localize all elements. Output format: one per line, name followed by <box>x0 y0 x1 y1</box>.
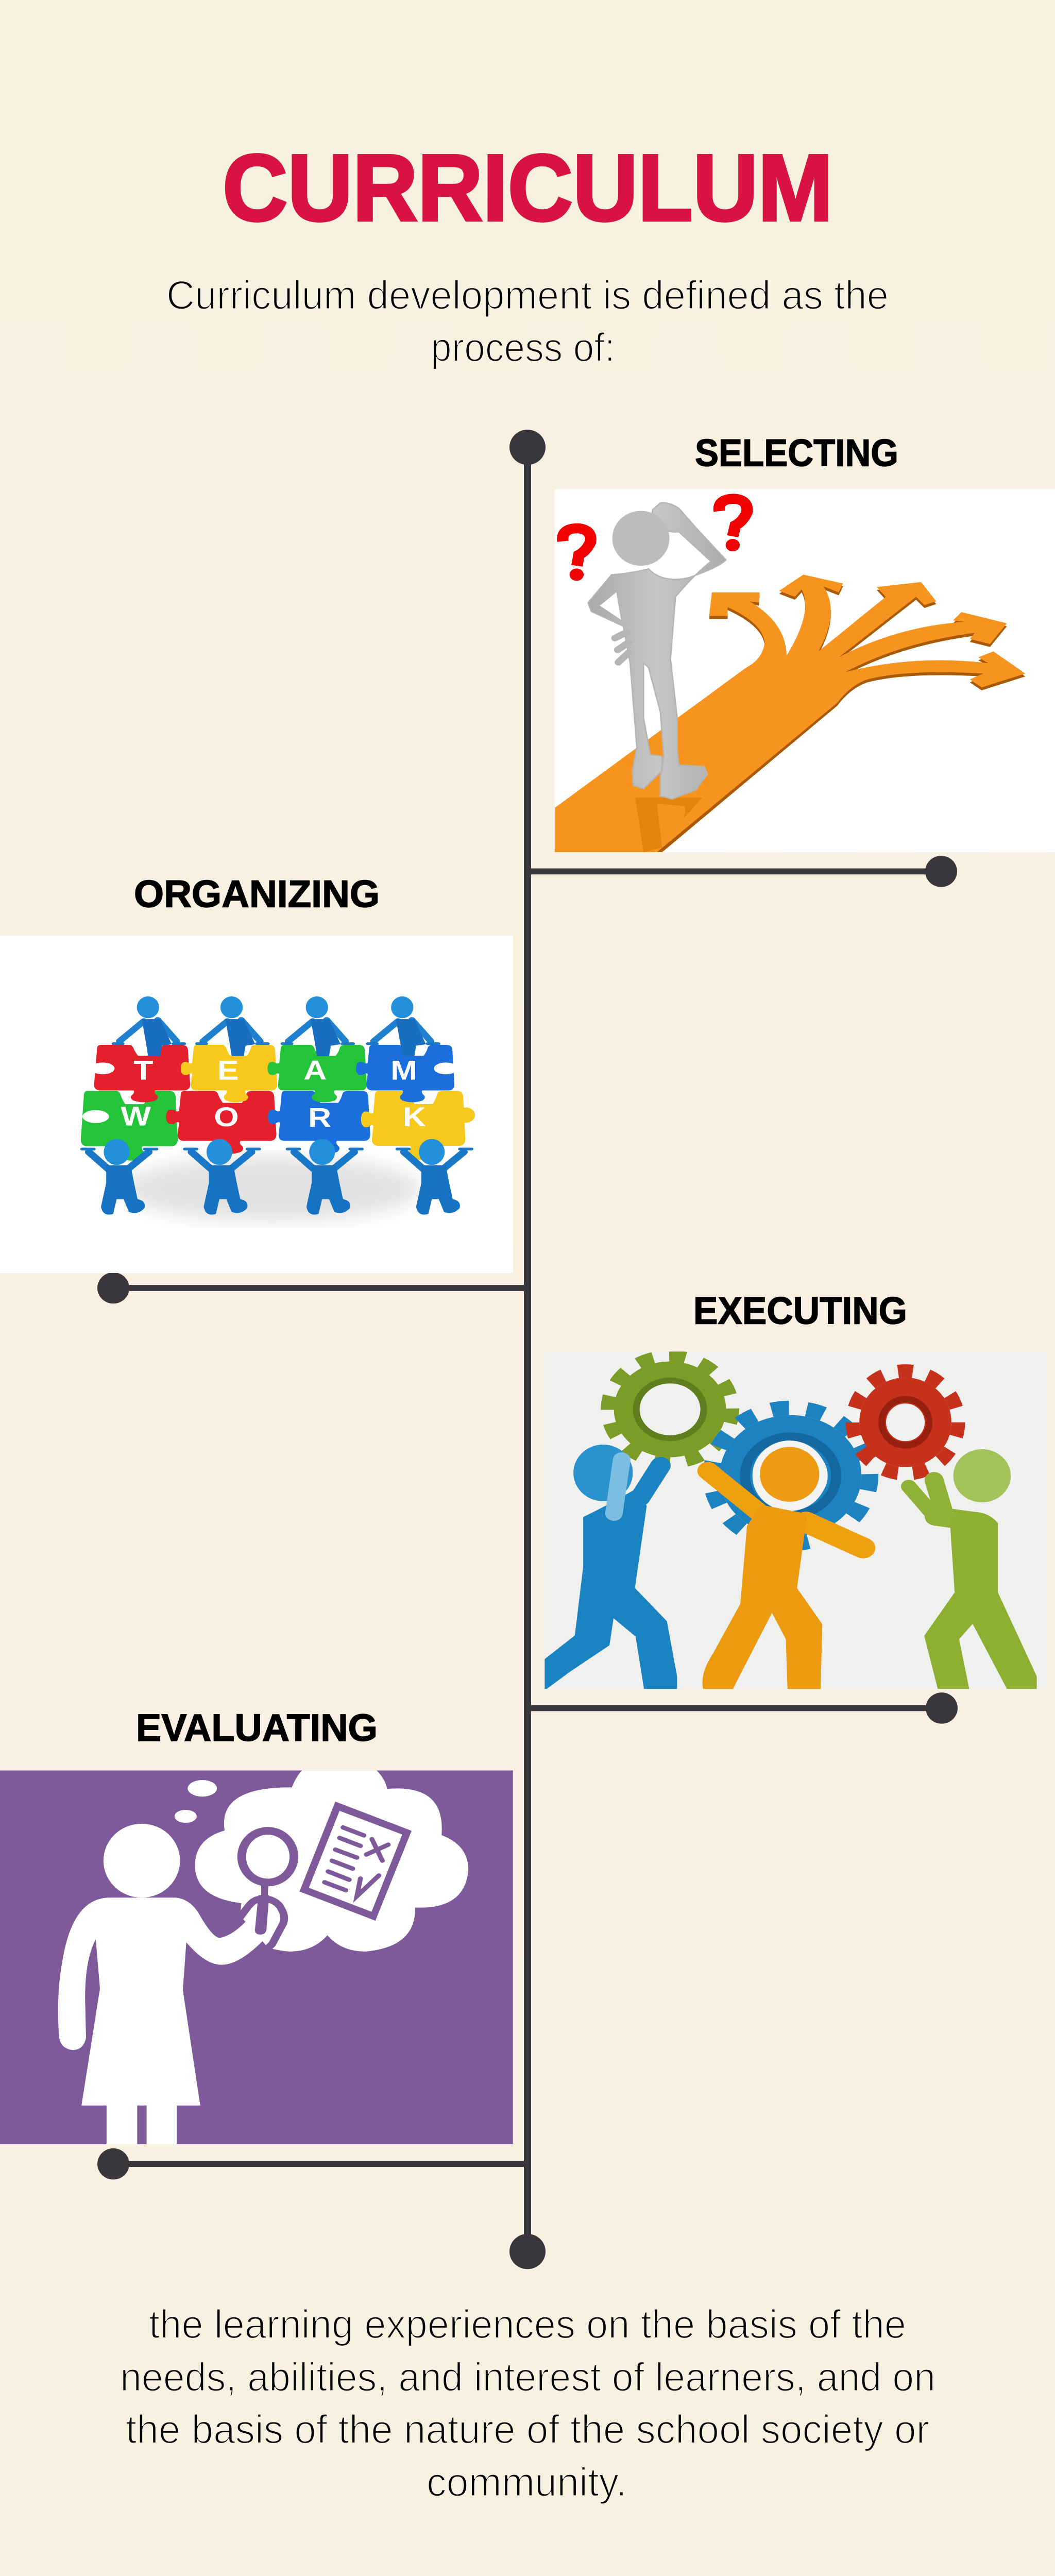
image: person evaluating a document <box>0 1768 513 2144</box>
connector: evaluating <box>97 2148 528 2179</box>
heading: organizing: ORGANIZING <box>134 873 380 916</box>
puzzle pieces: W <box>121 1101 151 1131</box>
image: people turning gears <box>544 1351 1047 1689</box>
puzzle pieces: T <box>134 1056 154 1086</box>
puzzle pieces: K <box>403 1102 426 1132</box>
puzzle pieces <box>81 1045 475 1161</box>
magnifying glass <box>242 1831 294 1935</box>
connector: organizing <box>97 1273 528 1303</box>
red gear <box>853 1371 958 1474</box>
puzzle pieces: R <box>308 1103 331 1133</box>
heading: executing: EXECUTING <box>693 1289 907 1332</box>
blue person <box>544 1445 676 1689</box>
green person <box>909 1449 1035 1689</box>
heading: selecting: SELECTING <box>695 431 898 474</box>
bottom row people <box>82 1139 472 1215</box>
closing text <box>120 2301 935 2505</box>
intro text <box>166 272 889 370</box>
woman silhouette <box>58 1824 279 2144</box>
hand outline band <box>234 1900 284 1952</box>
timeline spine <box>509 430 546 2269</box>
closing text: the learning experiences on the basis of the <box>149 2301 906 2347</box>
intro text: process of: <box>431 325 615 370</box>
question marks <box>563 499 747 566</box>
puzzle pieces: A <box>303 1056 327 1086</box>
puzzle pieces: O <box>214 1102 239 1132</box>
connector: executing <box>528 1692 958 1724</box>
top row people <box>113 996 439 1056</box>
closing text: the basis of the nature of the school society or <box>126 2406 929 2452</box>
puzzle pieces: E <box>217 1056 239 1086</box>
closing text: community. <box>427 2460 627 2505</box>
figure <box>588 503 726 799</box>
puzzle pieces: M <box>390 1056 417 1086</box>
blue gear <box>711 1408 870 1544</box>
image: person at branching arrows <box>555 489 1055 855</box>
closing text: needs, abilities, and interest of learners, and on <box>120 2354 935 2399</box>
thought bubbles <box>175 1780 217 1823</box>
image: teamwork puzzle <box>0 936 513 1273</box>
heading: evaluating: EVALUATING <box>136 1706 378 1749</box>
green gear <box>608 1357 731 1462</box>
intro text: Curriculum development is defined as the <box>166 272 889 317</box>
thought cloud <box>195 1768 468 1952</box>
orange person <box>704 1440 863 1689</box>
document <box>299 1802 412 1921</box>
title: CURRICULUM <box>223 135 833 241</box>
connector: selecting <box>528 856 957 887</box>
